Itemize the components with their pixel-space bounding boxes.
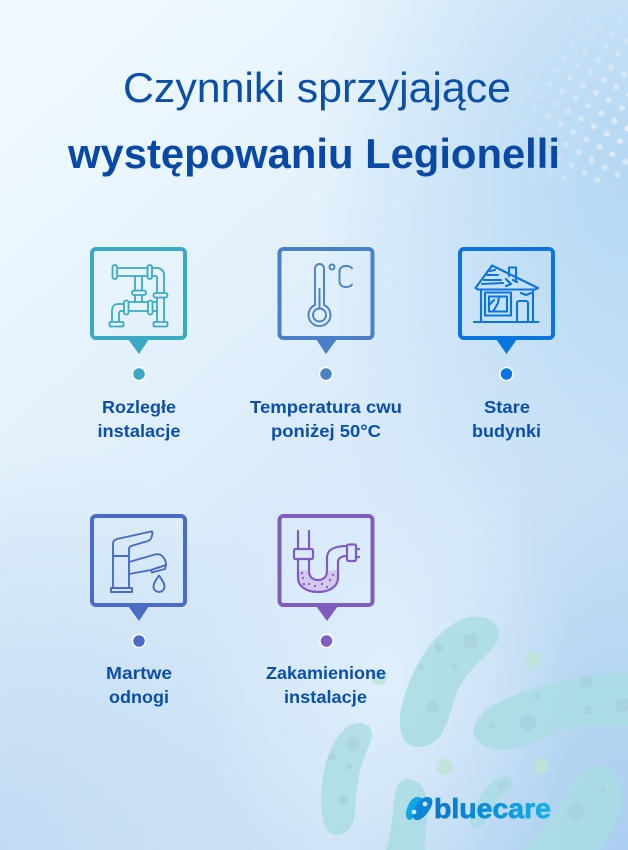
icon: pipes: [110, 265, 168, 326]
label: Zakamienione: [266, 663, 386, 683]
label: instalacje: [98, 421, 181, 441]
label: Rozległe: [102, 397, 176, 417]
label: poniżej 50°C: [271, 421, 381, 441]
logo mark: [406, 797, 432, 820]
label: [250, 397, 402, 441]
speech-bubble card 1: [92, 249, 185, 354]
label: Temperatura cwu: [250, 397, 402, 417]
title line 2: występowaniu Legionelli: [67, 130, 560, 177]
label: Stare: [484, 397, 530, 417]
speech-bubble card 3: [460, 249, 553, 354]
icon: damaged house: [474, 266, 538, 322]
label: [266, 663, 386, 707]
halftone dots top right: [529, 18, 628, 185]
logo wordmark: bluecare: [434, 793, 551, 824]
marker dot: [320, 368, 332, 380]
item: Martwe odnogi: [92, 516, 185, 707]
label: [472, 397, 541, 441]
marker dot: [132, 368, 146, 380]
speech-bubble card 4: [92, 516, 185, 621]
icon: faucet: [111, 532, 166, 592]
speech-bubble card 5: [280, 516, 372, 621]
bacteria decoration: [321, 617, 628, 850]
title: [67, 64, 560, 177]
marker dot: [500, 368, 513, 380]
marker dot: [320, 634, 333, 648]
item: Rozległe instalacje: [92, 249, 185, 441]
item: Zakamienione instalacje: [266, 516, 386, 707]
icon: thermometer: [308, 264, 352, 326]
label: Martwe: [106, 663, 172, 683]
speech-bubble card 2: [280, 249, 372, 354]
label: [106, 663, 172, 707]
title line 1: Czynniki sprzyjające: [123, 64, 511, 111]
label: odnogi: [109, 687, 169, 707]
label: instalacje: [284, 687, 367, 707]
logo: bluecare: [406, 793, 551, 824]
label: [98, 397, 181, 441]
item: Temperatura cwu: [250, 249, 402, 441]
item: Stare budynki: [460, 249, 553, 441]
marker dot: [132, 634, 146, 648]
label: budynki: [472, 421, 541, 441]
icon: clogged trap: [294, 531, 359, 592]
